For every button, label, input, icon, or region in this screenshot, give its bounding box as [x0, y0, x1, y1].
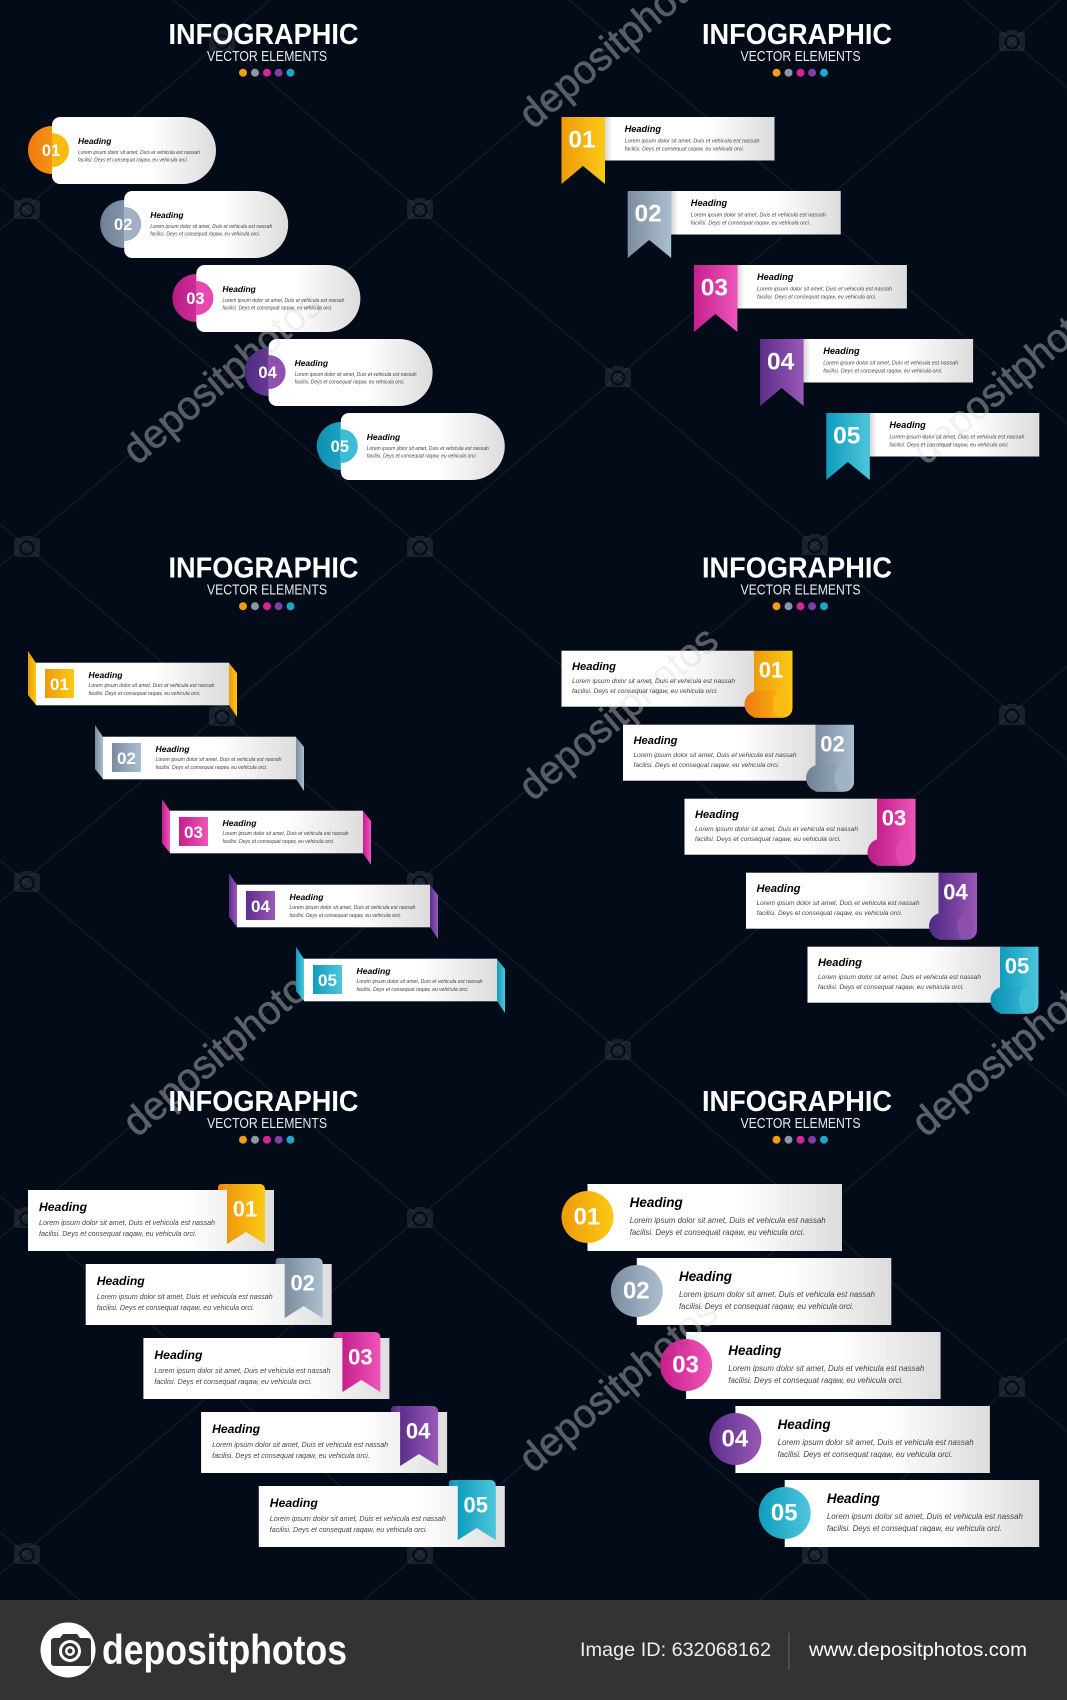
title: INFOGRAPHIC [168, 552, 359, 584]
step 01 [562, 651, 792, 718]
step 01: 01 [233, 1197, 257, 1222]
step 02 [95, 725, 304, 791]
step 03: 03 [882, 806, 906, 831]
step 01: Heading [88, 670, 123, 680]
step 02: facilisi. Deys et consequat raqaw, eu vehicula orci. [634, 762, 780, 769]
step 02: facilisi. Deys et consequat raqaw, eu vehicula orci. [156, 765, 268, 771]
panel: folded banners [28, 552, 505, 1013]
step 05: Lorem ipsum dolor sit amet, Duis et vehicula est nassah [827, 1512, 1023, 1521]
title [168, 552, 359, 610]
watermark overlay on panels: depositphotos [511, 1290, 726, 1481]
step 04: Lorem ipsum dolor sit amet, Duis et vehicula est nassah [778, 1438, 974, 1447]
watermarks: depositphotos [511, 618, 726, 809]
step 05: Heading [367, 432, 401, 442]
step 04 [709, 1406, 990, 1473]
step 05: 05 [318, 971, 337, 990]
step 04 [760, 339, 973, 406]
step 04: 04 [258, 364, 278, 382]
step 04: facilisi. Deys et consequat raqaw, eu vehicula orci. [778, 1450, 953, 1459]
step 01: facilisi. Deys et consequat raqaw, eu vehicula orci. [630, 1228, 805, 1237]
step 02: Heading [150, 210, 184, 220]
step 05 [296, 947, 505, 1013]
step 03: 03 [348, 1345, 373, 1370]
step 05: Lorem ipsum dolor sit amet, Duis et vehicula est nassah [818, 974, 981, 981]
step 04: 04 [722, 1425, 749, 1452]
step 04: Heading [778, 1417, 831, 1432]
step 04 [746, 873, 977, 940]
step 01: Lorem ipsum dolor sit amet, Duis et vehicula est nassah [572, 678, 735, 685]
step 03 [684, 799, 916, 866]
step 03: Lorem ipsum dolor sit amet, Duis et vehicula est nassah [728, 1364, 925, 1373]
step 05: 05 [464, 1493, 488, 1518]
step 02: 02 [117, 749, 136, 768]
watermarks [115, 0, 1067, 1481]
step 03: Heading [695, 809, 739, 821]
step 04: 04 [943, 880, 968, 905]
step 04: Heading [212, 1422, 261, 1436]
step 03: Lorem ipsum dolor sit amet, Duis et vehicula est nassah [222, 298, 345, 304]
step 02: Lorem ipsum dolor sit amet, Duis et vehicula est nassah [97, 1292, 273, 1301]
step 05 [759, 1480, 1039, 1547]
step 01: Lorem ipsum dolor sit amet, Duis et vehicula est nassah [630, 1216, 826, 1225]
step 05 [826, 413, 1039, 480]
step 05: Heading [827, 1491, 880, 1506]
step 02 [611, 1258, 891, 1325]
icon: camera logo [40, 1622, 96, 1678]
step 03: facilisi. Deys et consequat raqaw, eu vehicula orci. [222, 839, 334, 845]
step 05: facilisi. Deys et consequat raqaw, eu vehicula orci. [356, 987, 468, 993]
step 04: 04 [406, 1419, 431, 1444]
step 04: facilisi. Deys et consequat raqaw, eu vehicula orci. [823, 368, 943, 374]
step 03: Heading [728, 1343, 781, 1358]
watermark overlay on panels: depositphotos [511, 618, 726, 809]
step 03: Heading [222, 818, 257, 828]
step 01: 01 [574, 1203, 600, 1230]
step 03 [172, 265, 360, 332]
step 03: Lorem ipsum dolor sit amet, Duis et vehicula est nassah [757, 286, 892, 292]
step 02: Heading [97, 1274, 145, 1288]
step 05: Heading [270, 1496, 318, 1510]
website url: www.depositphotos.com [808, 1639, 1027, 1661]
title: INFOGRAPHIC [702, 19, 892, 51]
step 04: Heading [756, 883, 801, 895]
watermark overlay on panels: depositphotos [115, 282, 330, 473]
step 01: facilisi. Deys et consequat raqaw, eu vehicula orci. [625, 146, 744, 152]
step 04: Heading [290, 892, 324, 902]
step 01: facilisi. Deys et consequat raqaw, eu vehicula orci. [572, 688, 718, 695]
step 01: Lorem ipsum dolor sit amet, Duis et vehicula est nassah [78, 150, 200, 156]
step 02: Lorem ipsum dolor sit amet, Duis et vehicula est nassah [634, 752, 797, 759]
title [702, 19, 892, 77]
step 05: Lorem ipsum dolor sit amet, Duis et vehicula est nassah [356, 979, 483, 985]
step 04: facilisi. Deys et consequat raqaw, eu vehicula orci. [290, 913, 402, 919]
step 01: Heading [39, 1200, 88, 1214]
step 04: 04 [767, 349, 795, 376]
step 02: facilisi. Deys et consequat raqaw, eu vehicula orci. [679, 1302, 854, 1311]
watermark overlay on panels [115, 0, 1067, 1481]
step 02 [623, 725, 854, 792]
title: VECTOR ELEMENTS [207, 1116, 327, 1132]
step 03: facilisi. Deys et consequat raqaw, eu vehicula orci. [757, 294, 876, 300]
title [702, 1086, 892, 1144]
step 05 [317, 413, 505, 480]
step 02 [628, 191, 841, 258]
step 02: Heading [691, 198, 728, 208]
step 02: Lorem ipsum dolor sit amet, Duis et vehicula est nassah [150, 224, 272, 230]
step 01: 01 [50, 675, 69, 694]
step 04: Lorem ipsum dolor sit amet, Duis et vehicula est nassah [295, 372, 417, 378]
step 03: Heading [757, 272, 794, 282]
title: INFOGRAPHIC [702, 1086, 892, 1118]
step 03: Heading [222, 284, 257, 294]
step 01 [28, 117, 216, 184]
step 01: facilisi. Deys et consequat raqaw, eu vehicula orci. [88, 691, 200, 697]
step 01: Heading [625, 124, 661, 134]
step 04: Heading [295, 358, 329, 368]
panel: circle badges [562, 1086, 1039, 1547]
step 02: Heading [634, 735, 678, 747]
step 03: facilisi. Deys et consequat raqaw, eu vehicula orci. [222, 305, 332, 311]
step 04: facilisi. Deys et consequat raqaw, eu vehicula orci. [212, 1451, 370, 1460]
step 02: facilisi. Deys et consequat raqaw, eu vehicula orci. [691, 220, 810, 226]
title: VECTOR ELEMENTS [207, 582, 327, 598]
title: INFOGRAPHIC [168, 19, 359, 51]
step 05: 05 [833, 423, 860, 450]
step 01 [562, 1184, 842, 1251]
step 01: facilisi. Deys et consequat raqaw, eu vehicula orci. [39, 1229, 197, 1238]
step 04: Lorem ipsum dolor sit amet, Duis et vehicula est nassah [823, 360, 958, 366]
step 02: 02 [635, 201, 662, 228]
step 05: facilisi. Deys et consequat raqaw, eu vehicula orci. [367, 453, 477, 459]
step 02: Heading [679, 1269, 732, 1284]
step 02: facilisi. Deys et consequat raqaw, eu vehicula orci. [150, 231, 260, 237]
title [168, 1086, 359, 1144]
step 03 [660, 1332, 941, 1399]
step 02: 02 [820, 732, 845, 757]
step 03: Lorem ipsum dolor sit amet, Duis et vehicula est nassah [222, 831, 349, 837]
step 05: facilisi. Deys et consequat raqaw, eu vehicula orci. [270, 1525, 428, 1534]
step 05 [259, 1480, 505, 1547]
step 03: 03 [672, 1351, 699, 1378]
step 05: Heading [889, 420, 926, 430]
step 03: Heading [154, 1348, 203, 1362]
image id: Image ID: 632068162 [580, 1639, 771, 1661]
step 02: Lorem ipsum dolor sit amet, Duis et vehicula est nassah [691, 212, 826, 218]
step 01: 01 [759, 658, 783, 683]
step 03: 03 [184, 823, 203, 842]
step 05: Lorem ipsum dolor sit amet, Duis et vehicula est nassah [270, 1514, 446, 1523]
step 04: Heading [823, 346, 860, 356]
step 03 [143, 1332, 389, 1399]
panel: curled tabs [562, 552, 1038, 1014]
watermarks: depositphotos [115, 282, 330, 473]
step 01: facilisi. Deys et consequat raqaw, eu vehicula orci. [78, 157, 188, 163]
step 02: facilisi. Deys et consequat raqaw, eu vehicula orci. [97, 1303, 254, 1312]
step 05: 05 [771, 1499, 798, 1526]
title: VECTOR ELEMENTS [740, 582, 860, 598]
step 04 [229, 873, 438, 939]
step 05: Heading [356, 966, 391, 976]
step 01: Heading [630, 1195, 683, 1210]
title [168, 19, 359, 77]
watermarks: depositphotos [511, 1290, 726, 1481]
step 05 [808, 947, 1038, 1014]
step 04: Lorem ipsum dolor sit amet, Duis et vehicula est nassah [290, 905, 416, 911]
step 04: facilisi. Deys et consequat raqaw, eu vehicula orci. [295, 379, 405, 385]
step 01: Lorem ipsum dolor sit amet, Duis et vehicula est nassah [625, 138, 760, 144]
step 04 [201, 1406, 447, 1473]
step 03 [162, 799, 371, 865]
step 02: 02 [623, 1277, 650, 1304]
panel: rounded pills [28, 19, 505, 480]
step 02: Heading [156, 744, 190, 754]
step 04: 04 [251, 897, 270, 916]
step 05: facilisi. Deys et consequat raqaw, eu vehicula orci. [818, 984, 964, 991]
step 01 [28, 651, 237, 717]
step 01: 01 [568, 127, 596, 154]
step 01 [28, 1184, 274, 1251]
step 04: Lorem ipsum dolor sit amet, Duis et vehicula est nassah [756, 900, 920, 907]
step 03: 03 [701, 275, 728, 302]
step 04: Lorem ipsum dolor sit amet, Duis et vehicula est nassah [212, 1440, 388, 1449]
step 02 [86, 1258, 332, 1325]
step 02 [100, 191, 288, 258]
step 01: Lorem ipsum dolor sit amet, Duis et vehicula est nassah [39, 1218, 215, 1227]
step 05: 05 [1005, 954, 1029, 979]
step 02: Lorem ipsum dolor sit amet, Duis et vehicula est nassah [679, 1290, 876, 1299]
step 05: facilisi. Deys et consequat raqaw, eu vehicula orci. [889, 442, 1009, 448]
panel: hanging bookmarks [28, 1086, 505, 1547]
title: VECTOR ELEMENTS [740, 49, 860, 65]
step 05: Lorem ipsum dolor sit amet, Duis et vehicula est nassah [889, 434, 1024, 440]
panel: bookmark ribbons [562, 19, 1039, 480]
logo wordmark: depositphotos [102, 1626, 347, 1673]
footer bar [0, 1600, 1067, 1700]
step 04: facilisi. Deys et consequat raqaw, eu vehicula orci. [756, 910, 903, 917]
title: VECTOR ELEMENTS [740, 1116, 860, 1132]
step 05: Heading [818, 957, 862, 969]
step 03: facilisi. Deys et consequat raqaw, eu vehicula orci. [154, 1377, 312, 1386]
step 01 [562, 117, 774, 184]
step 01: Heading [78, 136, 112, 146]
step 01: 01 [42, 142, 60, 160]
step 02: 02 [114, 216, 132, 234]
title: VECTOR ELEMENTS [207, 49, 327, 65]
step 01: Heading [572, 661, 616, 673]
step 04 [245, 339, 433, 406]
step 03: Lorem ipsum dolor sit amet, Duis et vehicula est nassah [154, 1366, 330, 1375]
step 02: 02 [290, 1271, 315, 1296]
title [702, 552, 892, 610]
step 05: facilisi. Deys et consequat raqaw, eu vehicula orci. [827, 1524, 1002, 1533]
step 03: 03 [186, 290, 205, 308]
step 02: Lorem ipsum dolor sit amet, Duis et vehicula est nassah [156, 757, 282, 763]
title: INFOGRAPHIC [168, 1086, 359, 1118]
step 03 [694, 265, 907, 332]
step 01: Lorem ipsum dolor sit amet, Duis et vehicula est nassah [88, 683, 215, 689]
step 05: Lorem ipsum dolor sit amet, Duis et vehicula est nassah [367, 446, 489, 452]
step 03: facilisi. Deys et consequat raqaw, eu vehicula orci. [695, 836, 841, 843]
watermarks: depositphotos [115, 954, 330, 1145]
title: INFOGRAPHIC [702, 552, 892, 584]
step 05: 05 [331, 438, 349, 456]
step 03: facilisi. Deys et consequat raqaw, eu vehicula orci. [728, 1376, 903, 1385]
step 03: Lorem ipsum dolor sit amet, Duis et vehicula est nassah [695, 826, 858, 833]
